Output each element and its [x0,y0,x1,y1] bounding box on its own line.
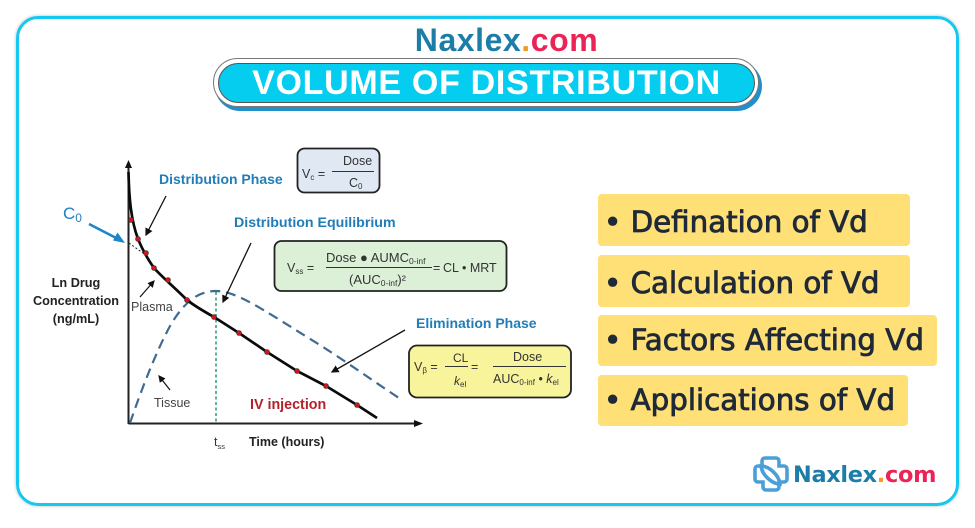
formula box: Vc: Dose [343,154,372,168]
footer logo [753,456,936,492]
y axis label: (ng/mL) [53,312,99,326]
y axis label: Concentration [33,294,119,308]
list item: definition [598,194,910,246]
formula box: Vbeta: AUC [493,372,519,386]
list item: applications [598,375,908,426]
formula box: Vss: 0-inf [409,256,426,266]
banner shadow [215,61,762,111]
C0 label: 0 [75,211,82,225]
formula box: Vc: = [314,167,325,181]
steady state marker line [215,292,217,423]
formula box: Vbeta: el [460,380,466,389]
formula box: Vss: ss [295,267,303,276]
formula box: Vbeta: CL [453,351,469,365]
formula box: Vss: = [303,261,314,275]
plasma data points [128,218,360,408]
plasma curve [128,172,377,418]
formula box: Vbeta: = [427,360,438,374]
formula box: Vss: V [287,261,295,275]
formula box: Vbeta: k [546,372,553,386]
distribution equilibrium arrow [223,243,251,302]
C0 extrapolation line [129,243,147,256]
icon: medical cross [753,456,789,492]
formula box: Vbeta [409,346,571,398]
logo text: Naxlex.com [793,462,936,488]
tss label: ss [217,442,225,451]
formula box: Vbeta: V [414,360,422,374]
axes [125,160,423,427]
formula box: Vbeta: el [553,378,559,387]
tss label: t [214,435,217,449]
plasma label: Plasma [131,300,173,314]
list item: calculation [598,255,910,307]
formula box: Vss: (AUC [349,272,381,287]
formula box: Vbeta: 0-inf [519,378,536,387]
list item: factors: • Factors Affecting Vd [604,323,924,357]
elimination phase label: Elimination Phase [416,315,537,331]
y axis label: Ln Drug [52,276,100,290]
x axis label: Time (hours) [249,435,324,449]
formula box: Vss: 0-inf [381,278,398,288]
banner title: VOLUME OF DISTRIBUTION [252,64,721,102]
formula box: Vss: CL • MRT [443,261,497,275]
formula box: Vss: = [433,261,440,275]
C0 arrow [89,224,125,243]
formula box: Vss: )² [397,272,407,287]
formula box: Vc [298,148,380,192]
IV injection label: IV injection [250,397,326,413]
formula box: Vbeta: Dose [513,350,542,364]
plasma arrow [140,281,154,297]
formula box: Vss: Dose ● AUMC [326,250,409,265]
formula box: Vc: C [349,176,358,190]
list item: factors [598,315,937,366]
formula box: Vbeta: k [454,374,460,388]
distribution phase arrow [146,196,166,235]
tissue curve [130,291,402,423]
formula box: Vss [274,241,506,291]
list item: applications: • Applications of Vd [604,383,895,417]
banner outline [213,58,759,107]
formula box: Vc: c [310,173,314,182]
distribution phase label: Distribution Phase [159,171,283,187]
list item: calculation: • Calculation of Vd [604,266,880,300]
distribution equilibrium label: Distribution Equilibrium [234,215,396,231]
list item: definition: • Defination of Vd [604,205,868,239]
elimination phase arrow [332,330,405,372]
formula box: Vbeta: β [422,366,427,375]
formula box: Vc: V [302,167,310,181]
C0 label: C [63,204,75,223]
title banner [213,58,762,111]
formula box: Vbeta: = [471,360,478,374]
brand heading: Naxlex.com [415,22,598,58]
formula box: Vbeta: • [535,372,546,386]
formula box: Vc: 0 [358,182,363,191]
tissue arrow [159,376,170,390]
tissue label: Tissue [154,396,190,410]
